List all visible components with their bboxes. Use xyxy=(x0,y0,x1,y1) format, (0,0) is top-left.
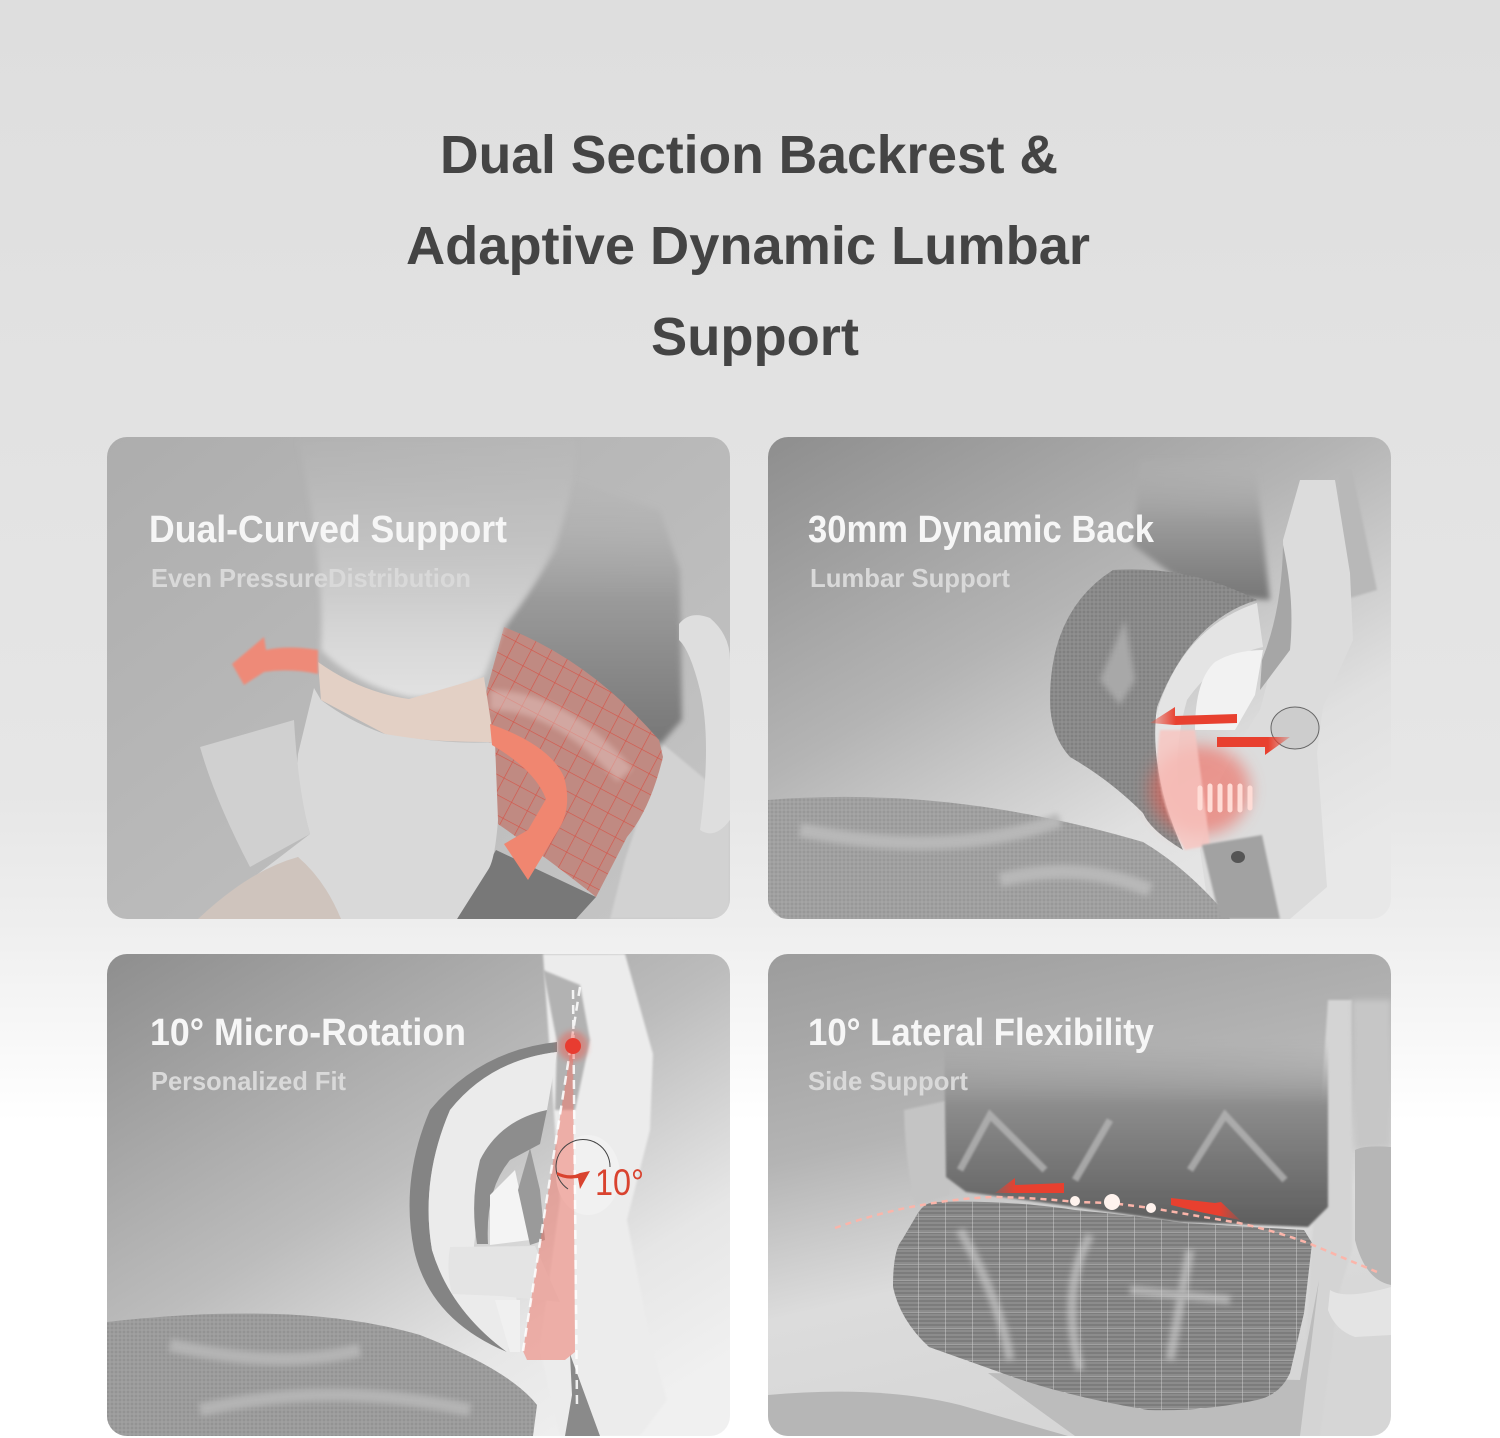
panel: lateral flexibility xyxy=(768,954,1391,1436)
mesh thin arc xyxy=(410,1042,557,1352)
subheading: Lumbar Support xyxy=(810,563,1010,593)
light armrest xyxy=(1328,1287,1391,1337)
white arc frame xyxy=(1155,603,1263,762)
angle pointer xyxy=(557,1171,590,1189)
heading: Dual-Curved Support xyxy=(149,509,507,551)
white inner pad xyxy=(429,1052,557,1352)
upper mesh xyxy=(944,1040,1328,1227)
dark lower column xyxy=(565,1354,600,1436)
pivot circle xyxy=(1271,707,1319,749)
lumbar mesh pad xyxy=(1050,569,1257,850)
axis lines xyxy=(523,987,580,1407)
mesh upper backrest xyxy=(505,524,685,746)
red mesh lumbar xyxy=(484,627,663,897)
bottom seat mesh xyxy=(768,1392,1068,1436)
torso shirt xyxy=(314,500,556,699)
seat xyxy=(457,850,596,919)
icon: curved arrow left xyxy=(232,637,318,685)
right frame column xyxy=(1300,1000,1352,1436)
heading: 30mm Dynamic Back xyxy=(808,509,1155,551)
headrest mesh xyxy=(1132,492,1273,603)
red wedge xyxy=(523,1035,575,1360)
icon: curved arrow down xyxy=(490,724,567,880)
screw hole xyxy=(1231,851,1245,863)
spring rod xyxy=(448,1246,560,1302)
subheading: Personalized Fit xyxy=(151,1066,346,1096)
hollow xyxy=(490,1170,530,1245)
lower arm xyxy=(1202,835,1280,919)
other leg xyxy=(200,720,310,867)
lumbar pad mesh xyxy=(893,1202,1312,1410)
heading: 10° Lateral Flexibility xyxy=(808,1012,1154,1054)
waist skin xyxy=(318,662,494,742)
headrest side xyxy=(1341,507,1377,598)
main frame xyxy=(1200,480,1353,919)
chair frame right xyxy=(610,744,730,919)
top mesh sliver xyxy=(543,970,590,1110)
title: Adaptive Dynamic Lumbar xyxy=(406,216,1090,276)
flex curve xyxy=(835,1197,1377,1272)
inner mesh arc xyxy=(474,1110,547,1244)
heading: 10° Micro-Rotation xyxy=(150,1012,466,1054)
icon: arrow left xyxy=(1150,707,1237,725)
spring xyxy=(1200,786,1250,810)
icon: arrow left xyxy=(995,1178,1064,1193)
angle label: 10° xyxy=(595,1162,644,1203)
arc opening xyxy=(1195,650,1263,730)
frame channel xyxy=(1260,545,1291,690)
panel: dual-curved support xyxy=(107,437,730,919)
panel: 30mm dynamic back xyxy=(768,437,1391,919)
red glow mechanism xyxy=(1150,745,1250,835)
pivot dot xyxy=(558,1031,588,1061)
knob xyxy=(556,1135,620,1215)
seat mesh xyxy=(768,797,1230,919)
icon: arrow right xyxy=(1171,1198,1240,1220)
angle ring xyxy=(556,1140,610,1189)
hips and thigh xyxy=(250,688,498,919)
dark armrest xyxy=(1355,1146,1391,1285)
title xyxy=(406,125,1090,367)
subheading: Side Support xyxy=(808,1066,968,1096)
armrest xyxy=(679,615,730,833)
subheading: Even PressureDistribution xyxy=(151,563,471,593)
flex dots xyxy=(1070,1194,1156,1213)
title: Support xyxy=(651,307,859,367)
lower bracket xyxy=(495,1300,520,1352)
chair base xyxy=(988,1280,1319,1436)
title: Dual Section Backrest & xyxy=(440,125,1058,185)
icon: arrow right xyxy=(1217,737,1290,755)
left side frame xyxy=(904,1100,950,1205)
seat mesh xyxy=(107,1314,537,1436)
chair frame xyxy=(542,954,654,1284)
grey link xyxy=(518,1148,545,1245)
lower leg skin xyxy=(198,857,341,919)
panel: micro-rotation xyxy=(107,954,730,1436)
